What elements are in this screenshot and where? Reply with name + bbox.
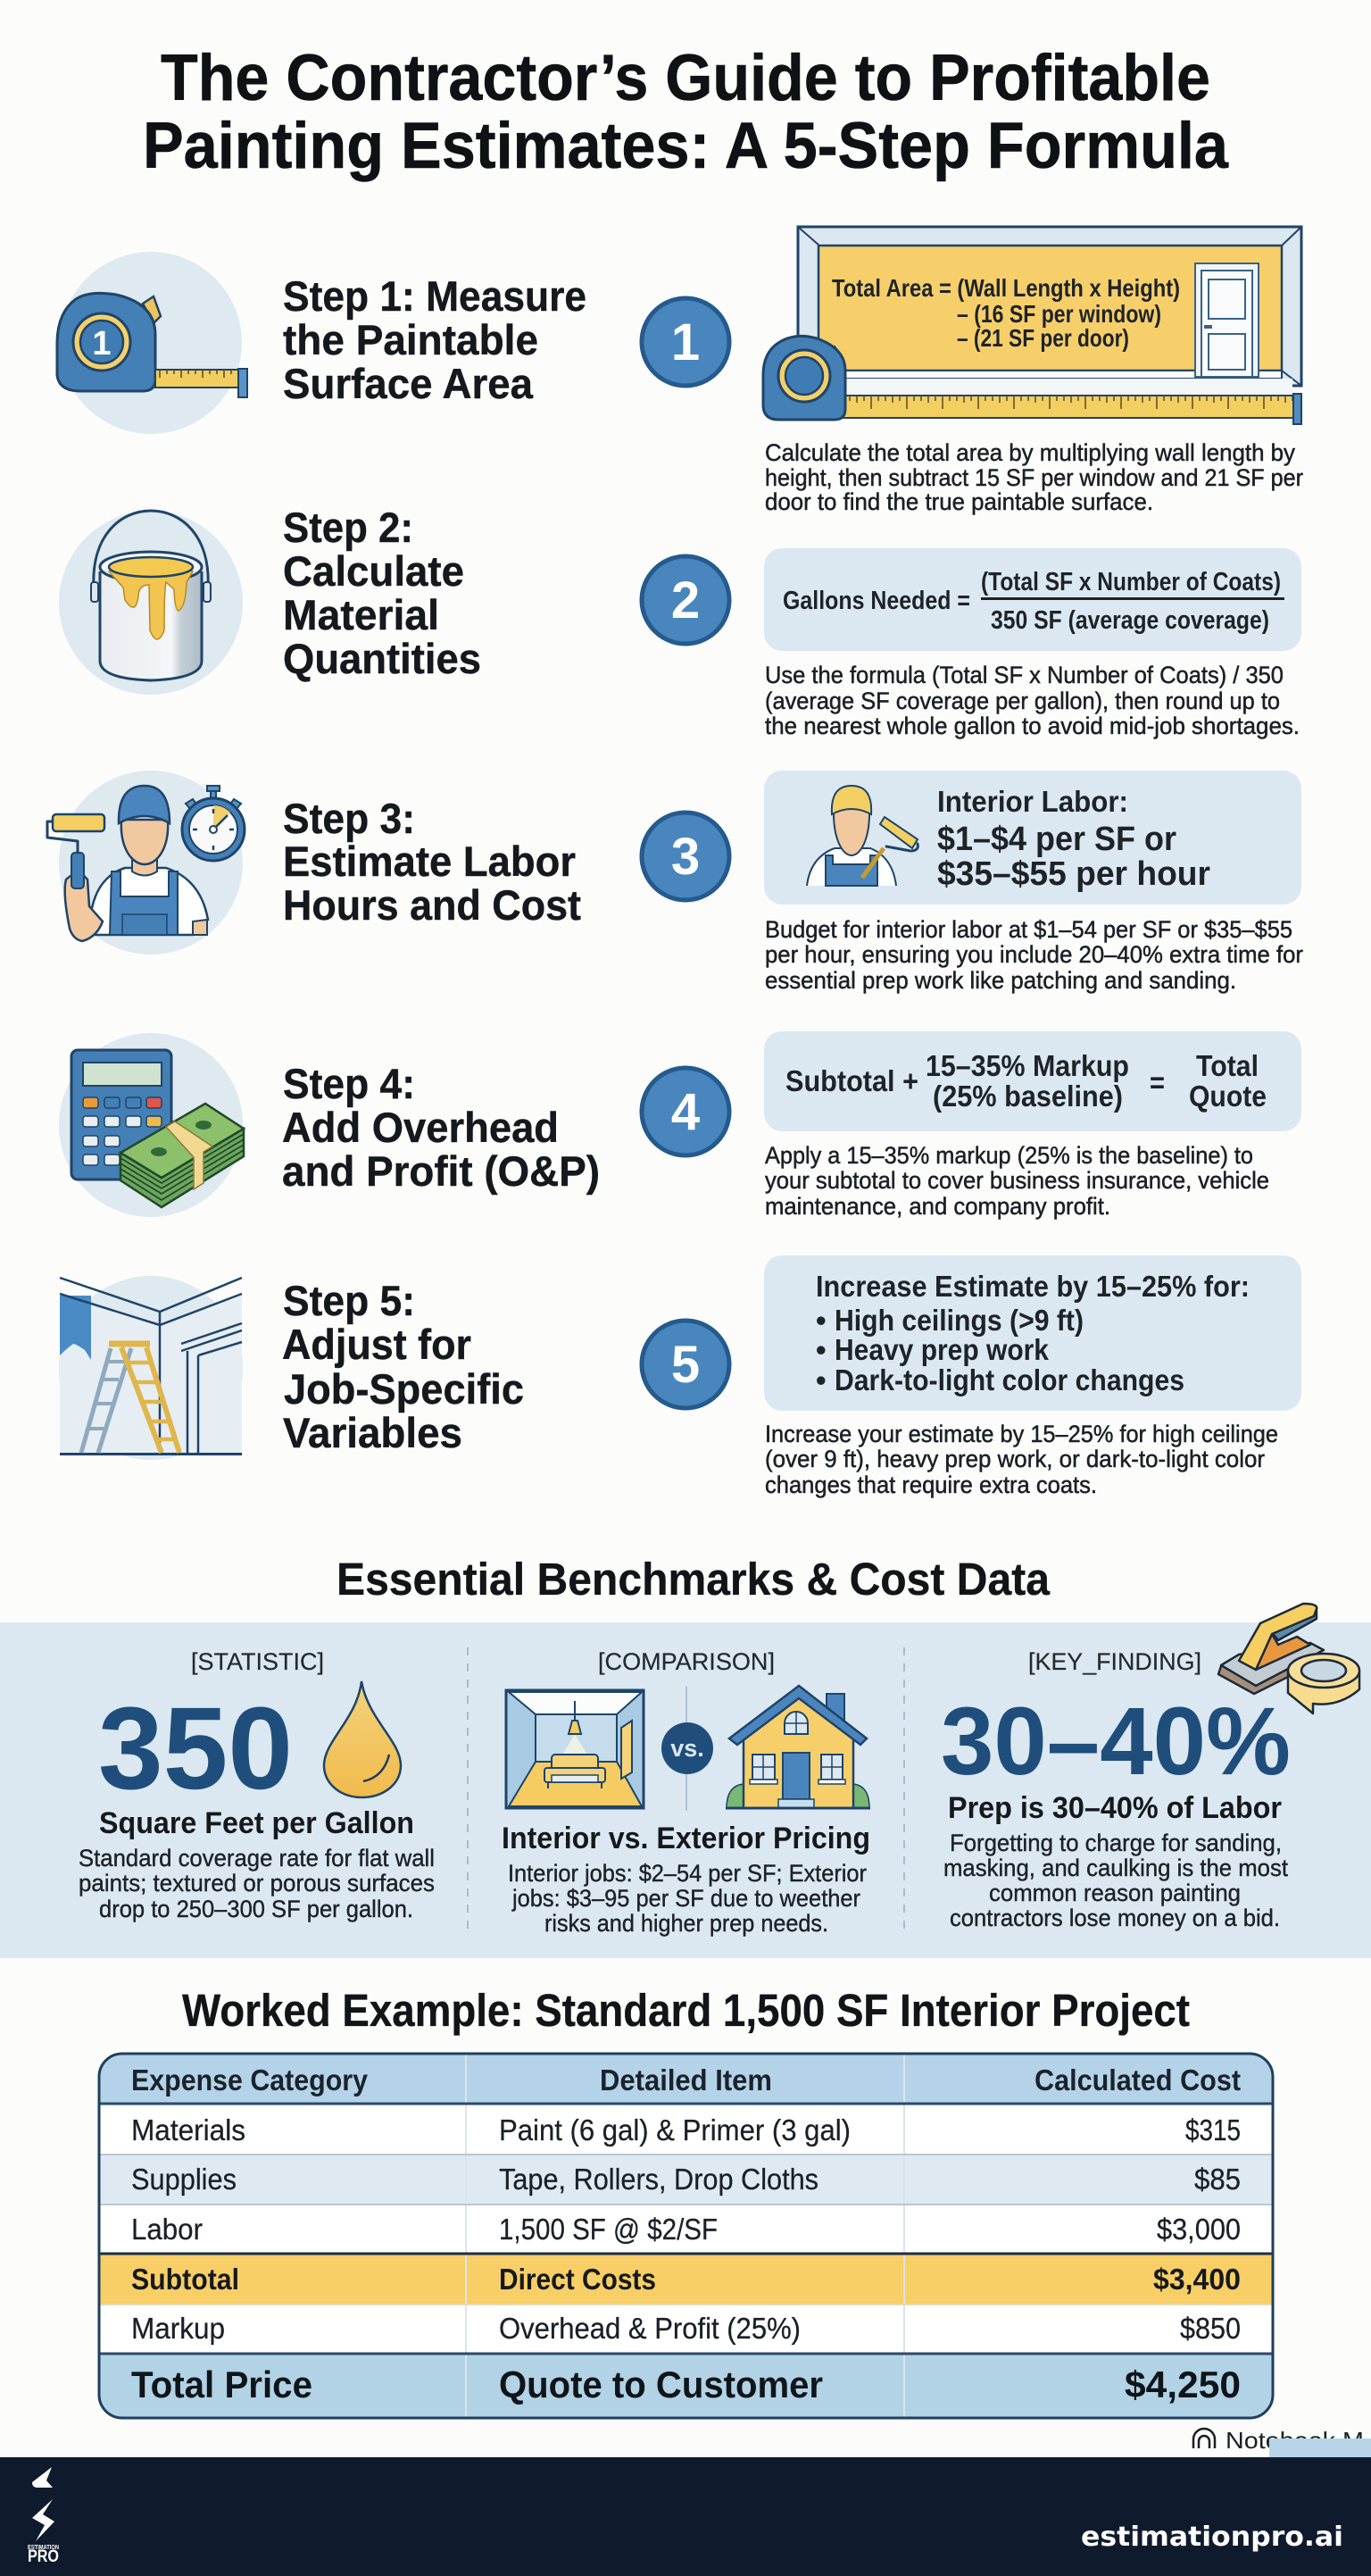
notebook watermark: Notebook M	[1226, 2427, 1364, 2454]
panel: interior labor: Interior Labor:	[937, 785, 1128, 818]
ladder	[81, 1344, 179, 1453]
step 4 number	[642, 1068, 729, 1155]
key finding: prep share: Forgetting to charge for sanding,	[950, 1830, 1282, 1856]
step 5 heading	[282, 1277, 524, 1456]
heading: worked example: Worked Example: Standard 1,500 SF Interior Project	[182, 1985, 1190, 2036]
panel: benchmarks band	[0, 1622, 1371, 1958]
row: markup: Overhead & Profit (25%)	[499, 2312, 801, 2345]
row: total price: $4,250	[1125, 2363, 1241, 2405]
door	[1195, 263, 1259, 377]
key finding: prep share: common reason painting	[989, 1880, 1241, 1906]
formula text: Total Area = (Wall Length x Height)	[832, 274, 1180, 302]
header row: Expense Category	[131, 2063, 369, 2097]
panel: markup formula: 15–35% Markup	[926, 1049, 1129, 1082]
row: markup: Markup	[131, 2312, 225, 2345]
step 5 number	[642, 1321, 729, 1408]
panel: markup formula: Total	[1196, 1049, 1259, 1082]
header row: Calculated Cost	[1034, 2063, 1241, 2097]
row: supplies: Supplies	[131, 2163, 237, 2196]
panel: increase estimate list: High ceilings (>9 ft)	[835, 1304, 1084, 1337]
row: materials: $315	[1185, 2113, 1241, 2147]
icon: tape measure: 1	[92, 325, 112, 363]
step 2 heading: Step 2:	[283, 504, 413, 551]
step 1 number: 1	[671, 313, 700, 371]
panel: increase estimate list: •	[816, 1333, 827, 1366]
step 4 heading: and Profit (O&P)	[282, 1147, 600, 1195]
step 3 description: essential prep work like patching and sanding.	[765, 967, 1236, 994]
key finding: prep share: masking, and caulking is the most	[943, 1855, 1288, 1881]
table: worked example	[99, 2054, 1273, 2418]
step 2 description	[765, 662, 1300, 739]
logo: PRO	[28, 2547, 59, 2566]
step 3 number: 3	[671, 828, 700, 886]
row: subtotal	[131, 2263, 1241, 2296]
row: materials: Paint (6 gal) & Primer (3 gal)	[499, 2113, 851, 2147]
panel: increase estimate list: Dark-to-light color changes	[835, 1363, 1184, 1396]
row: labor: 1,500 SF @ $2/SF	[499, 2213, 718, 2246]
icon: calculator and cash	[59, 1033, 244, 1217]
cash stack	[120, 1104, 244, 1207]
panel: increase estimate list: •	[816, 1304, 827, 1337]
formula text: – (21 SF per door)	[957, 324, 1129, 352]
stat: 350 square feet: 350	[98, 1682, 293, 1813]
row: labor	[131, 2213, 1241, 2246]
logo: ESTIMATION	[28, 2545, 59, 2551]
panel: gallons formula: (Total SF x Number of Coats)	[981, 568, 1281, 596]
step 5 description: changes that require extra coats.	[765, 1471, 1097, 1498]
stat: 350 square feet: drop to 250–300 SF per gallon.	[99, 1896, 413, 1922]
vs badge: vs.	[670, 1735, 704, 1762]
step 1 description: height, then subtract 15 SF per window and 21 SF per	[765, 464, 1303, 491]
comparison: interior vs exterior	[502, 1648, 870, 1937]
stat: 350 square feet: Square Feet per Gallon	[99, 1806, 414, 1840]
vs badge	[661, 1722, 713, 1774]
step 5 description	[765, 1421, 1278, 1498]
panel: markup formula: =	[1150, 1066, 1165, 1099]
step 3 description: Budget for interior labor at $1–54 per SF or $35–$55	[765, 916, 1292, 943]
step 2 description: the nearest whole gallon to avoid mid-job shortages.	[765, 713, 1300, 739]
title: The Contractor’s Guide to Profitable	[161, 42, 1210, 114]
row: materials	[131, 2113, 1241, 2147]
stat: 350 square feet: Standard coverage rate for flat wall	[79, 1845, 435, 1872]
step 5 heading: Variables	[283, 1409, 462, 1456]
stat: 350 square feet: [STATISTIC]	[191, 1648, 324, 1675]
step 2 number	[642, 556, 729, 644]
step 2 heading: Material	[283, 591, 439, 638]
panel: gallons formula: 350 SF (average coverage)	[991, 606, 1269, 635]
step 2 description: (average SF coverage per gallon), then round up to	[765, 688, 1280, 714]
icon: worker	[807, 786, 918, 886]
row: supplies: Tape, Rollers, Drop Cloths	[499, 2163, 818, 2196]
stat: 350 square feet: paints; textured or porous surfaces	[79, 1870, 435, 1897]
step 3 heading: Hours and Cost	[283, 881, 581, 929]
step 5 description: Increase your estimate by 15–25% for high ceilinge	[765, 1421, 1278, 1447]
key finding: prep share: [KEY_FINDING]	[1028, 1648, 1201, 1675]
icon: room with ladder	[59, 1276, 243, 1460]
panel: wall area formula	[763, 227, 1301, 424]
step 4 number: 4	[671, 1083, 700, 1141]
step 3 description	[765, 916, 1303, 994]
icon: paint bucket	[59, 511, 243, 695]
comparison: interior vs exterior: Interior vs. Exterior Pricing	[502, 1822, 870, 1855]
title	[143, 42, 1229, 182]
icon: sanding block and masking tape	[1218, 1604, 1359, 1713]
step 2 number: 2	[671, 571, 700, 629]
formula text	[832, 274, 1180, 352]
step 1 description	[765, 439, 1303, 515]
footer bar	[0, 2457, 1371, 2576]
step 5 heading: Step 5:	[283, 1277, 415, 1324]
panel: markup formula	[764, 1031, 1301, 1131]
panel: increase estimate list: Heavy prep work	[835, 1333, 1050, 1366]
header row	[131, 2063, 1241, 2097]
panel: markup formula: Quote	[1189, 1080, 1267, 1113]
row: subtotal: Direct Costs	[499, 2263, 656, 2296]
row: labor: $3,000	[1157, 2213, 1241, 2246]
step 1 heading: Step 1: Measure	[283, 272, 586, 320]
header row: Detailed Item	[600, 2063, 772, 2097]
step 4 description: maintenance, and company profit.	[765, 1193, 1110, 1220]
step 4 description: your subtotal to cover business insurance, vehicle	[765, 1167, 1269, 1194]
key finding: prep share: Prep is 30–40% of Labor	[948, 1791, 1282, 1825]
torso	[89, 868, 208, 935]
stopwatch	[182, 786, 245, 861]
step 3 heading: Step 3:	[283, 795, 415, 842]
row: total price	[131, 2363, 1241, 2405]
step 1 heading: Surface Area	[283, 360, 534, 407]
key finding: prep share	[941, 1648, 1291, 1931]
row: supplies	[131, 2163, 1241, 2196]
icon: tape measure	[57, 252, 247, 434]
panel: gallons formula: Gallons Needed =	[783, 587, 970, 615]
step 2 heading: Quantities	[283, 635, 481, 682]
icon: painter with stopwatch	[47, 771, 245, 955]
row: markup: $850	[1180, 2312, 1241, 2345]
head	[132, 853, 157, 875]
panel: increase estimate list: •	[816, 1363, 827, 1396]
step 1 heading: the Paintable	[283, 316, 538, 363]
step 4 heading	[282, 1060, 600, 1195]
step 5 description: (over 9 ft), heavy prep work, or dark-to-light color	[765, 1446, 1265, 1472]
row: materials: Materials	[131, 2113, 245, 2147]
comparison: interior vs exterior: Interior jobs: $2–54 per SF; Exterior	[508, 1860, 867, 1887]
step 4 heading: Step 4:	[283, 1060, 415, 1107]
comparison: interior vs exterior: risks and higher prep needs.	[544, 1910, 828, 1937]
step 4 heading: Add Overhead	[282, 1104, 559, 1151]
stat: 350 square feet	[79, 1648, 435, 1922]
step 4 description: Apply a 15–35% markup (25% is the baseline) to	[765, 1142, 1253, 1169]
notebook watermark	[1193, 2427, 1371, 2457]
step 5 number: 5	[671, 1336, 700, 1394]
row: subtotal: $3,400	[1153, 2263, 1241, 2296]
panel: interior labor	[764, 771, 1301, 905]
step 2 description: Use the formula (Total SF x Number of Coats) / 350	[765, 662, 1284, 688]
row: supplies: $85	[1194, 2163, 1241, 2196]
step 1 heading	[283, 272, 586, 407]
icon: interior room	[506, 1690, 644, 1808]
panel: markup formula: (25% baseline)	[933, 1080, 1123, 1113]
panel: interior labor: $35–$55 per hour	[937, 855, 1210, 893]
step 3 number	[642, 813, 729, 900]
comparison: interior vs exterior: jobs: $3–95 per SF due to weether	[511, 1885, 860, 1912]
panel: markup formula: Subtotal +	[785, 1064, 918, 1097]
step 3 description: per hour, ensuring you include 20–40% extra time for	[765, 941, 1303, 968]
step 4 description	[765, 1142, 1269, 1220]
panel: gallons formula	[764, 548, 1301, 651]
panel: increase estimate list	[764, 1255, 1301, 1411]
step 1 number	[642, 298, 729, 386]
title: Painting Estimates: A 5-Step Formula	[143, 110, 1229, 182]
heading: benchmarks: Essential Benchmarks & Cost Data	[337, 1554, 1051, 1605]
icon: house	[726, 1686, 870, 1808]
roller and arm	[65, 873, 103, 941]
row: markup	[131, 2312, 1241, 2345]
row: total price: Total Price	[131, 2363, 312, 2405]
calculator	[71, 1050, 171, 1180]
website: estimationpro.ai	[1081, 2522, 1343, 2553]
step 2 heading: Calculate	[283, 547, 464, 595]
key finding: prep share: 30–40%	[941, 1687, 1291, 1795]
step 3 heading: Estimate Labor	[283, 838, 576, 885]
step 5 heading: Job-Specific	[284, 1365, 524, 1413]
step 1 description: Calculate the total area by multiplying wall length by	[765, 439, 1295, 466]
step 3 heading	[283, 795, 581, 929]
comparison: interior vs exterior: [COMPARISON]	[598, 1648, 775, 1675]
row: subtotal: Subtotal	[131, 2263, 239, 2296]
step 2 heading	[283, 504, 481, 682]
row: labor: Labor	[131, 2213, 203, 2246]
measuring tape	[763, 336, 1301, 424]
step 5 heading: Adjust for	[282, 1321, 471, 1368]
panel: increase estimate list: Increase Estimate by 15–25% for:	[816, 1270, 1250, 1303]
key finding: prep share: contractors lose money on a bid.	[950, 1905, 1280, 1931]
icon: paint drop	[324, 1681, 401, 1797]
logo	[28, 2467, 59, 2566]
formula text: – (16 SF per window)	[957, 300, 1161, 328]
row: total price: Quote to Customer	[499, 2363, 823, 2405]
panel: interior labor: $1–$4 per SF or	[937, 821, 1176, 858]
step 1 description: door to find the true paintable surface.	[765, 488, 1153, 515]
